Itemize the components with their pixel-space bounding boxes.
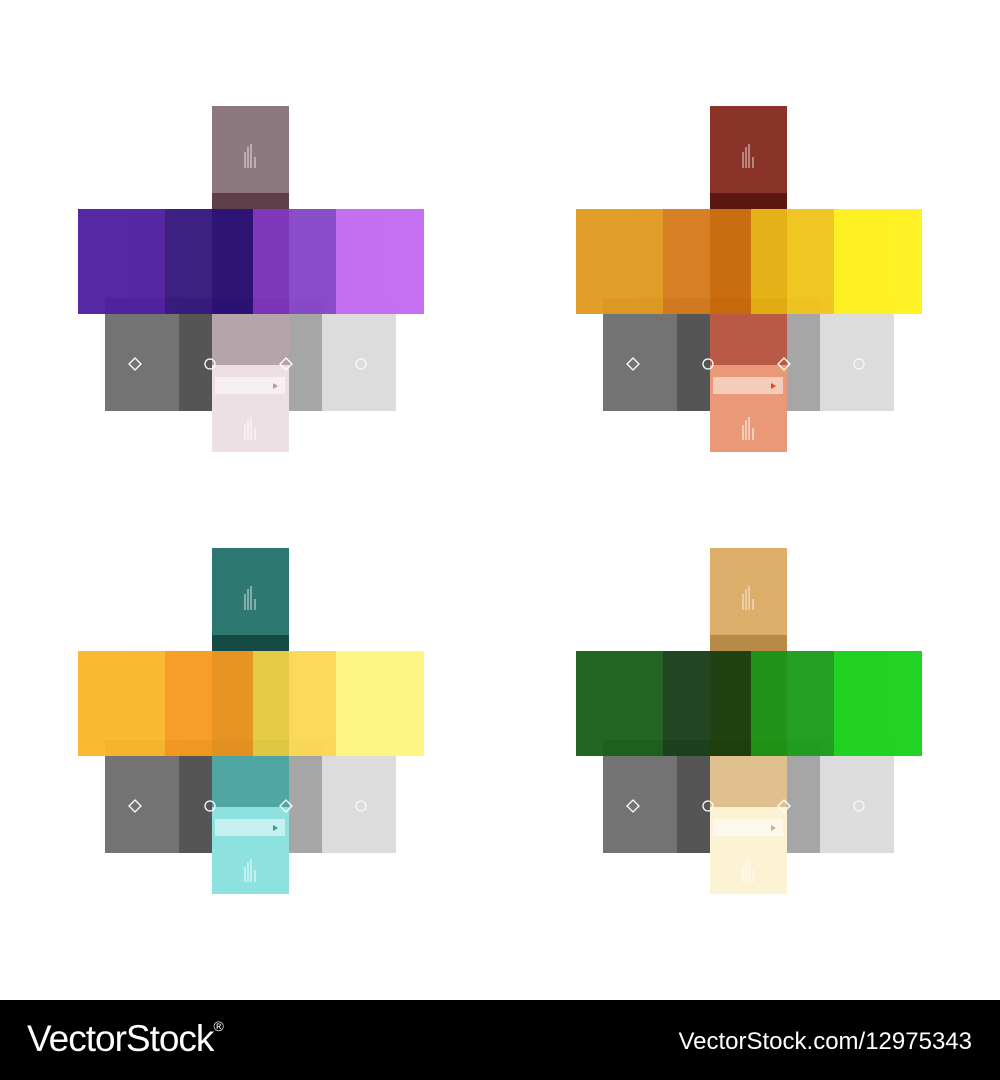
- cluster: yellow teal: [78, 548, 424, 894]
- main bar: [78, 209, 424, 314]
- cluster: purple: [78, 106, 424, 452]
- footer url: VectorStock.com/12975343: [678, 1028, 972, 1055]
- footer: [0, 1000, 1000, 1080]
- bottom tab: [212, 365, 289, 452]
- footer logo: VectorStock®: [27, 1018, 223, 1059]
- cluster: green: [576, 548, 922, 894]
- icons: [129, 358, 366, 370]
- top tab: [212, 106, 289, 209]
- cluster: orange: [576, 106, 922, 452]
- gray blocks: [105, 298, 396, 411]
